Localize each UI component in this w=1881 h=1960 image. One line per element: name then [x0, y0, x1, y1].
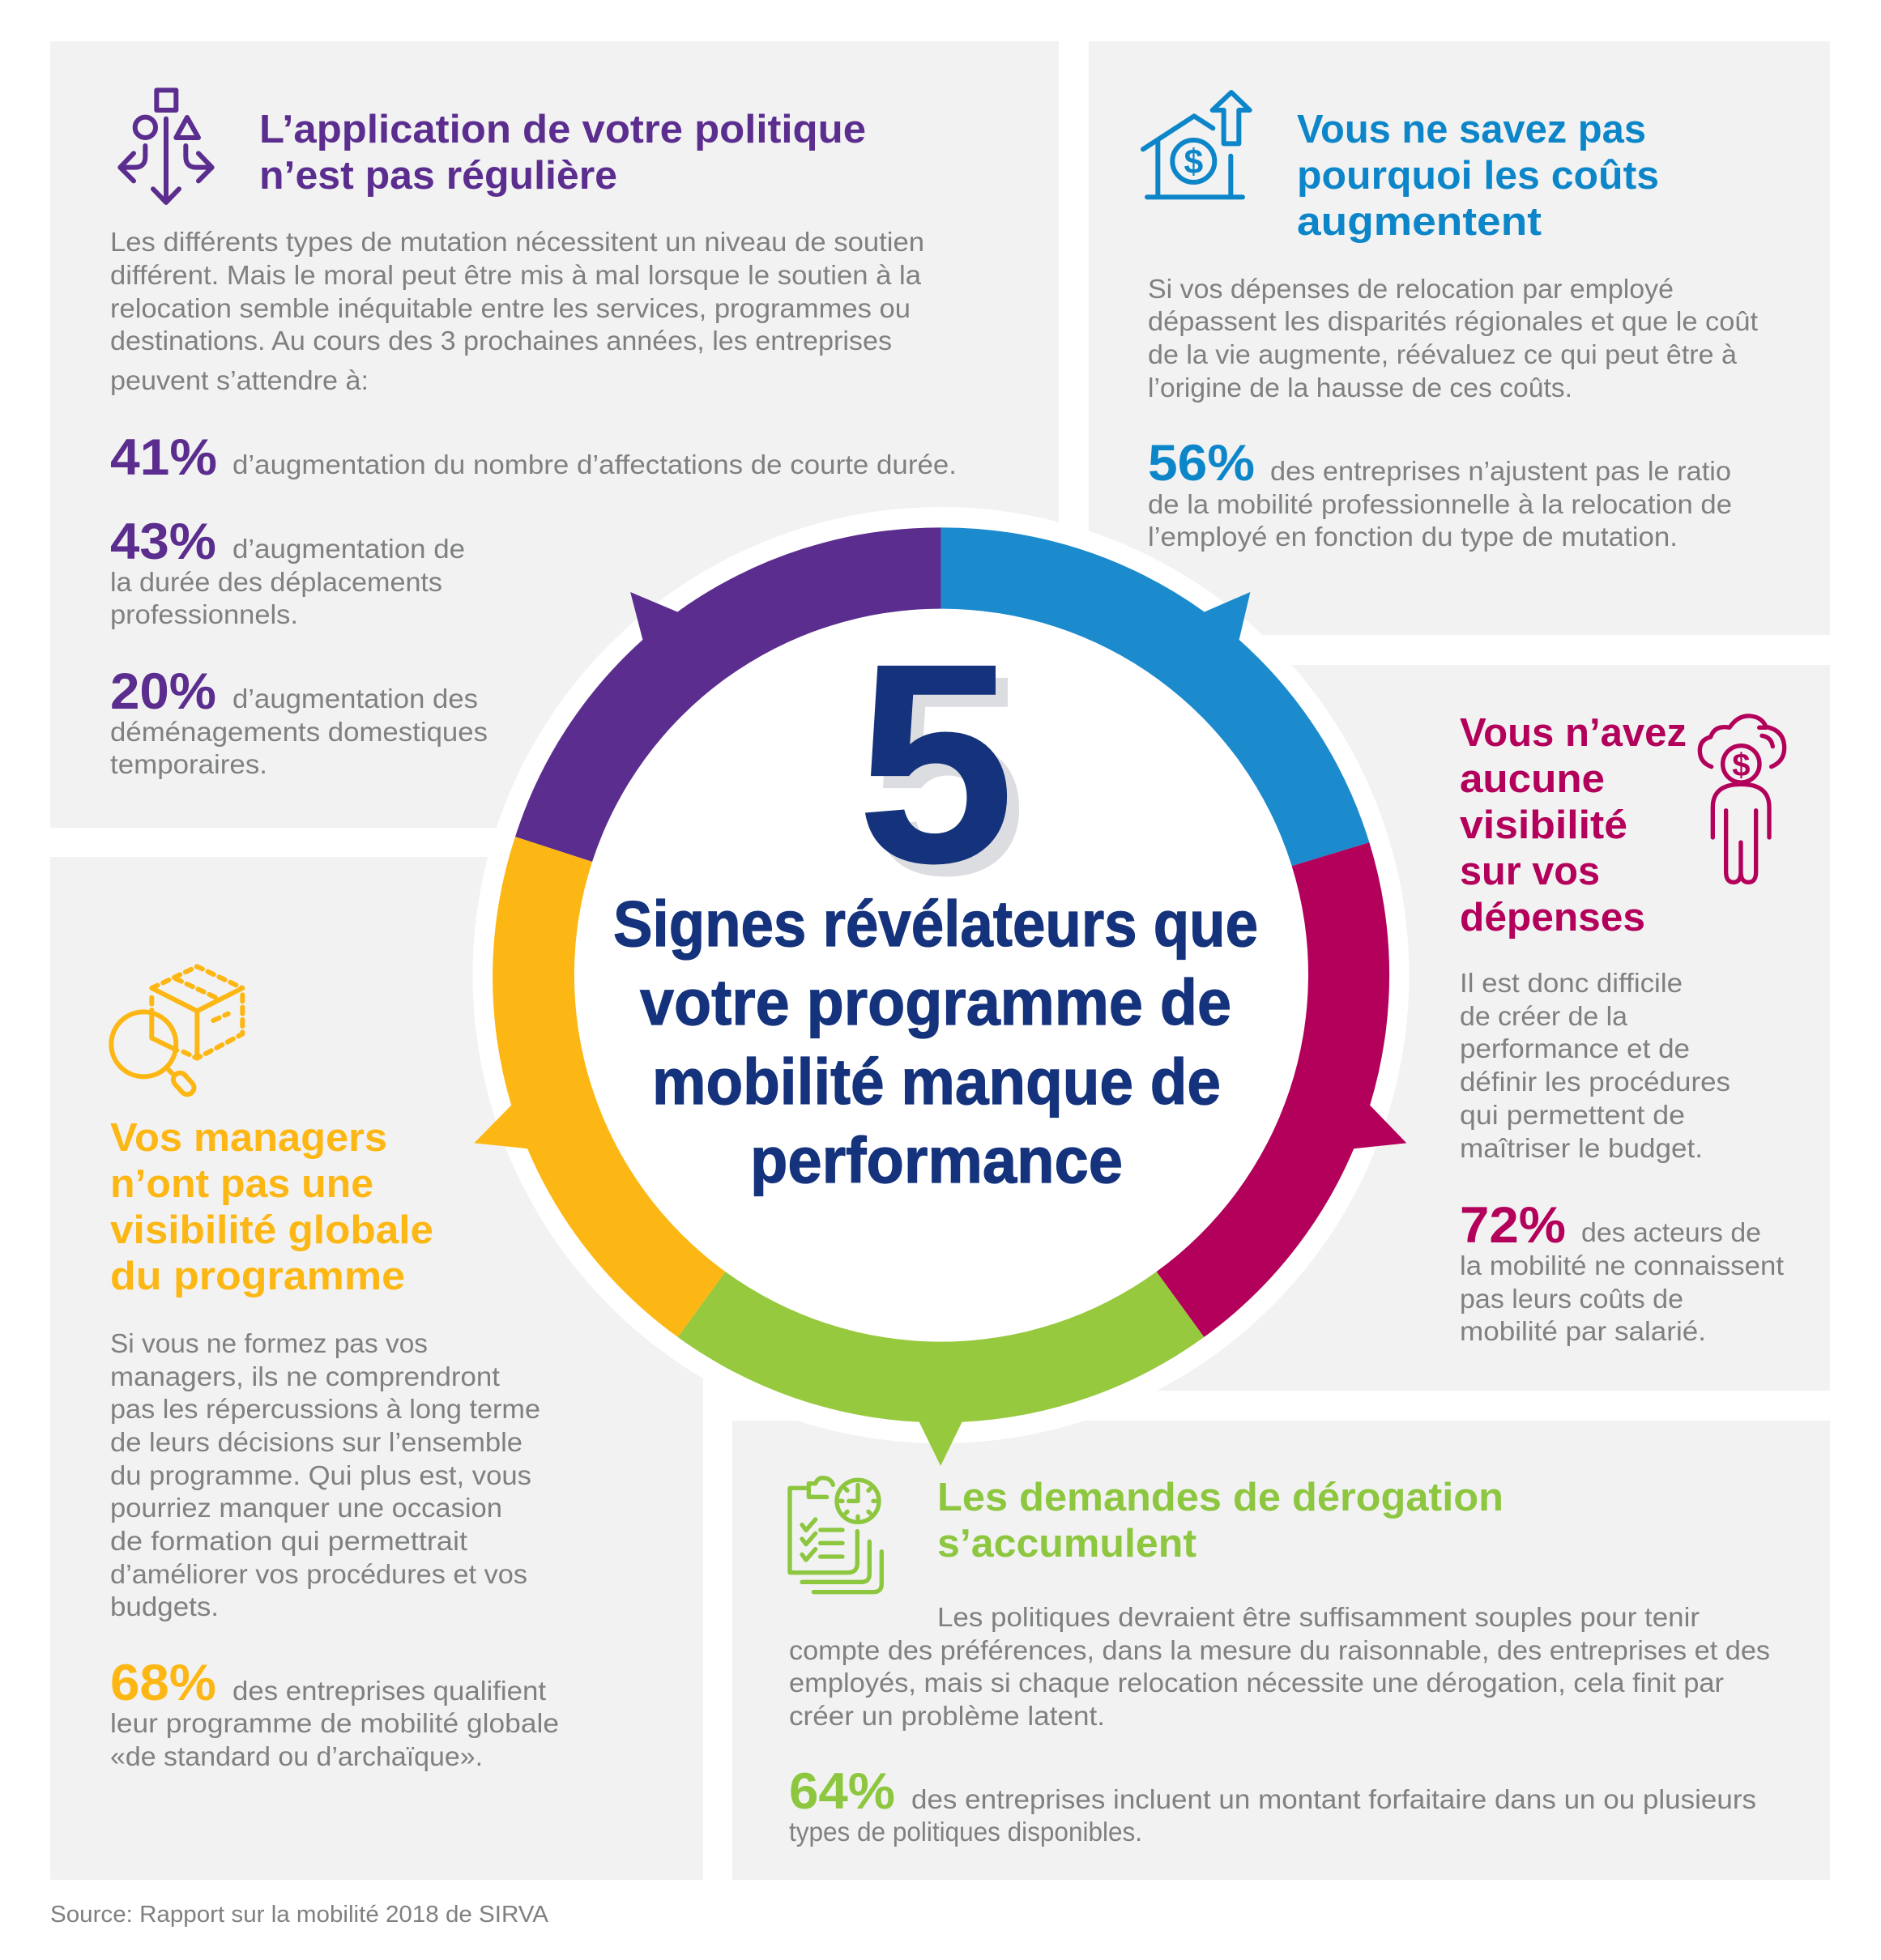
ring segment: blue — [941, 527, 1369, 866]
heading: no spending visibility: dépenses — [1460, 896, 1645, 940]
text block: policy intro: différent. Mais le moral peut être mis à mal lorsque le soutien à la — [110, 260, 922, 290]
heading: waivers pile up: s’accumulent — [937, 1522, 1196, 1566]
stat: 68%: leur programme de mobilité globale — [110, 1708, 559, 1738]
text block: managers visibility: pourriez manquer une occasion — [110, 1493, 502, 1523]
heading: managers visibility: du programme — [110, 1255, 405, 1298]
text block: managers visibility: du programme. Qui plus est, vous — [110, 1460, 531, 1490]
stat: 20%: 20% — [110, 663, 216, 720]
heading: rising costs: augmentent — [1297, 200, 1542, 244]
stat: 64%: des entreprises incluent un montant forfaitaire dans un ou plusieurs — [911, 1784, 1756, 1814]
text block: no spending visibility: maîtriser le budget. — [1460, 1133, 1703, 1163]
stat: 64% — [789, 1763, 1756, 1847]
text block: policy intro: relocation semble inéquitable entre les services, programmes ou — [110, 293, 911, 323]
heading: rising costs: Vous ne savez pas — [1297, 108, 1646, 151]
stat: 68%: des entreprises qualifient — [232, 1676, 546, 1706]
ring segment: yellow — [474, 837, 725, 1337]
stat: 43%: la durée des déplacements — [110, 567, 442, 597]
stat: 41%: 41% — [110, 429, 217, 486]
text block: no spending visibility: performance et de — [1460, 1033, 1690, 1063]
text block: managers visibility: managers, ils ne comprendront — [110, 1361, 500, 1391]
heading: policy application: n’est pas régulière — [259, 154, 617, 198]
heading: no spending visibility: aucune — [1460, 757, 1605, 801]
stat: 41% — [110, 429, 957, 486]
heading: waivers pile up: Les demandes de dérogation — [937, 1476, 1504, 1519]
text block: waivers pile up: employés, mais si chaque relocation nécessite une dérogation, cela finit par — [789, 1668, 1724, 1698]
text block: managers visibility — [110, 1328, 540, 1621]
heading: rising costs — [1297, 108, 1659, 244]
icon: clipboard with clock — [790, 1478, 881, 1592]
icon: person with dollar head and cloud: $ — [1732, 748, 1750, 783]
title: performance — [750, 1124, 1123, 1196]
text block: waivers pile up: créer un problème latent. — [789, 1701, 1105, 1731]
text block: rising costs — [1148, 274, 1758, 403]
stat: 56%: l’employé en fonction du type de mutation. — [1148, 522, 1678, 552]
text block: rising costs: l’origine de la hausse de ces coûts. — [1148, 373, 1572, 403]
ring segment: purple — [515, 527, 941, 862]
icon: box under magnifying glass — [111, 966, 242, 1097]
text block: managers visibility: Si vous ne formez pas vos — [110, 1328, 428, 1358]
title: mobilité manque de — [652, 1046, 1221, 1118]
stat: 56%: de la mobilité professionnelle à la relocation de — [1148, 489, 1732, 519]
title: votre programme de — [640, 966, 1231, 1038]
text block: waivers pile up: Les politiques devraient être suffisamment souples pour tenir — [937, 1602, 1700, 1632]
panel: policy application — [50, 41, 1059, 828]
text block: managers visibility: de leurs décisions sur l’ensemble — [110, 1427, 522, 1457]
ring segment: green — [678, 1272, 1204, 1466]
icon: shapes and diverging arrows — [120, 90, 212, 202]
ring segment: magenta — [1157, 842, 1406, 1337]
heading: policy application: L’application de votre politique — [259, 108, 866, 151]
text block: no spending visibility: définir les procédures — [1460, 1067, 1730, 1097]
heading: managers visibility: Vos managers — [110, 1116, 387, 1160]
heading: managers visibility — [110, 1116, 433, 1298]
text block: policy intro: destinations. Au cours des 3 prochaines années, les entreprises — [110, 326, 892, 356]
panel: rising costs — [1089, 41, 1830, 635]
big number 5 with shadow: 5 — [868, 616, 1027, 935]
stat: 20% — [110, 663, 488, 779]
stat: 20%: déménagements domestiques — [110, 717, 488, 747]
ring of five coloured arrows — [474, 527, 1406, 1466]
text block: rising costs: dépassent les disparités régionales et que le coût — [1148, 306, 1758, 336]
stat: 68%: «de standard ou d’archaïque». — [110, 1741, 483, 1771]
stat: 72%: pas leurs coûts de — [1460, 1284, 1683, 1314]
heading: no spending visibility: sur vos — [1460, 850, 1600, 893]
stat: 64%: 64% — [789, 1763, 895, 1820]
heading: waivers pile up — [937, 1476, 1504, 1566]
icon: person with dollar head and cloud — [1700, 716, 1785, 882]
stat: 72%: 72% — [1460, 1197, 1566, 1254]
source note: Source: Rapport sur la mobilité 2018 de SIRVA — [50, 1902, 549, 1928]
text block: managers visibility: de formation qui permettrait — [110, 1526, 467, 1556]
text block: rising costs: de la vie augmente, réévaluez ce qui peut être à — [1148, 339, 1738, 369]
stat: 72%: mobilité par salarié. — [1460, 1316, 1706, 1346]
heading: policy application — [259, 108, 866, 198]
title: Signes révélateurs que — [613, 888, 1258, 960]
stat: 43% — [110, 513, 465, 629]
text block: rising costs: Si vos dépenses de relocation par employé — [1148, 274, 1674, 304]
stat: 43%: professionnels. — [110, 599, 298, 629]
white disc — [473, 507, 1410, 1443]
text block: no spending visibility: qui permettent de — [1460, 1100, 1685, 1130]
panel: managers visibility — [50, 857, 703, 1880]
text block: managers visibility: pas les répercussions à long terme — [110, 1394, 540, 1424]
text block: waivers pile up — [789, 1602, 1770, 1731]
stat: 64%: types de politiques disponibles. — [789, 1817, 1142, 1847]
icon: house with dollar and up arrow: $ — [1184, 143, 1203, 181]
stat: 72%: des acteurs de — [1581, 1217, 1761, 1247]
text block: policy intro — [110, 227, 924, 395]
icon: house with dollar and up arrow — [1143, 92, 1250, 197]
panel: no spending visibility — [1053, 665, 1830, 1391]
text block: policy intro: Les différents types de mutation nécessitent un niveau de soutien — [110, 227, 924, 257]
stat: 72%: la mobilité ne connaissent — [1460, 1251, 1784, 1280]
text block: no spending visibility: de créer de la — [1460, 1001, 1628, 1031]
heading: rising costs: pourquoi les coûts — [1297, 154, 1659, 198]
heading: no spending visibility: visibilité — [1460, 803, 1627, 847]
text block: waivers pile up: compte des préférences, dans la mesure du raisonnable, des entreprises et des — [789, 1635, 1770, 1665]
stat: 72% — [1460, 1197, 1784, 1346]
text block: policy intro: peuvent s’attendre à: — [110, 365, 369, 395]
stat: 56%: 56% — [1148, 435, 1255, 492]
text block: managers visibility: budgets. — [110, 1591, 219, 1621]
central circle graphic — [473, 507, 1410, 1466]
text block: no spending visibility: Il est donc difficile — [1460, 968, 1683, 998]
stat: 41%: d’augmentation du nombre d’affectations de courte durée. — [232, 450, 957, 479]
stat: 56%: des entreprises n’ajustent pas le ratio — [1270, 456, 1731, 486]
stat: 43%: d’augmentation de — [232, 534, 465, 564]
title — [613, 888, 1258, 1196]
heading: no spending visibility — [1460, 711, 1687, 940]
stat: 56% — [1148, 435, 1732, 552]
heading: managers visibility: visibilité globale — [110, 1208, 433, 1252]
stat: 68% — [110, 1655, 559, 1771]
stat: 68%: 68% — [110, 1655, 216, 1711]
stat: 20%: temporaires. — [110, 749, 267, 779]
text block: managers visibility: d’améliorer vos procédures et vos — [110, 1559, 527, 1589]
big number 5 with shadow: 5 — [856, 603, 1015, 922]
heading: managers visibility: n’ont pas une — [110, 1162, 373, 1206]
stat: 20%: d’augmentation des — [232, 684, 478, 714]
text block: no spending visibility — [1460, 968, 1730, 1163]
panel: waivers pile up — [732, 1421, 1830, 1880]
heading: no spending visibility: Vous n’avez — [1460, 711, 1687, 755]
stat: 43%: 43% — [110, 513, 216, 570]
